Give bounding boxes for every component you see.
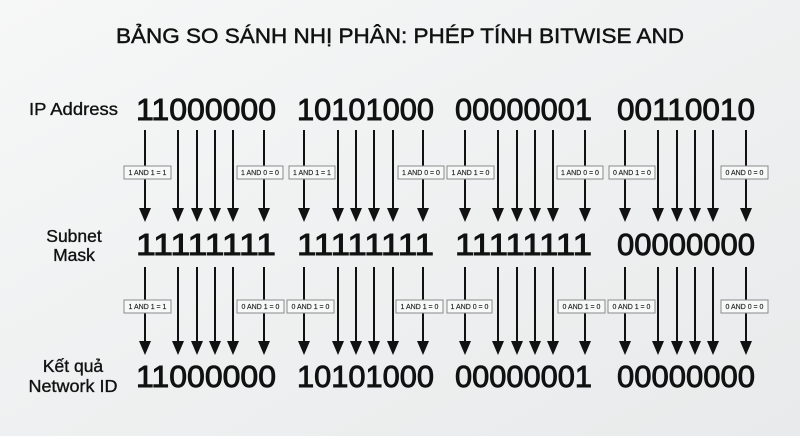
IP address binary: 00000001 (455, 92, 592, 127)
network ID binary: 10101000 (297, 359, 434, 394)
subnet mask binary: 00000000 (617, 227, 755, 262)
IP address binary: 10101000 (297, 92, 434, 127)
operation labels row 2: 0 AND 0 = 0 (726, 304, 764, 311)
subnet mask binary: 11111111 (455, 227, 592, 262)
operation labels row 1: 0 AND 0 = 0 (726, 170, 764, 177)
row label: Network ID (28, 356, 118, 396)
IP address binary: 00110010 (617, 92, 755, 127)
operation labels row 1: 1 AND 0 = 0 (241, 170, 279, 177)
arrows: mask to result (139, 267, 752, 355)
operation labels row 1: 1 AND 1 = 0 (452, 170, 490, 177)
operation labels row 1 (124, 166, 768, 179)
row label: Subnet Mask: Subnet (46, 226, 102, 246)
network ID binary: 11000000 (136, 359, 276, 394)
operation labels row 2: 1 AND 0 = 0 (451, 304, 489, 311)
operation labels row 2 (124, 300, 768, 313)
operation labels row 2: 0 AND 1 = 0 (563, 304, 601, 311)
subnet mask binary: 11111111 (297, 227, 434, 262)
row label: Network ID: Network ID (28, 376, 118, 396)
IP address binary: 11000000 (136, 92, 276, 127)
network ID binary: 00000000 (617, 359, 755, 394)
row label: Subnet Mask (46, 226, 102, 265)
title: BẢNG SO SÁNH NHỊ PHÂN: PHÉP TÍNH BITWISE AND (116, 25, 684, 48)
network ID binary: 00000001 (455, 359, 592, 394)
operation labels row 1: 0 AND 1 = 0 (613, 170, 651, 177)
operation labels row 1: 1 AND 1 = 1 (129, 170, 167, 177)
operation labels row 2: 1 AND 1 = 1 (129, 304, 167, 311)
subnet mask binary (136, 227, 755, 262)
operation labels row 2: 0 AND 1 = 0 (613, 304, 651, 311)
arrows: IP to mask (139, 130, 752, 222)
operation labels row 2: 1 AND 1 = 0 (401, 304, 439, 311)
operation labels row 1: 1 AND 1 = 1 (293, 170, 331, 177)
row label: IP Address: IP Address (29, 99, 118, 119)
operation labels row 1: 1 AND 0 = 0 (402, 170, 440, 177)
subnet mask binary: 11111111 (136, 227, 276, 262)
operation labels row 2: 0 AND 1 = 0 (292, 304, 330, 311)
network ID binary (136, 359, 755, 394)
operation labels row 1: 1 AND 0 = 0 (561, 170, 599, 177)
row label: Subnet Mask: Mask (53, 245, 95, 265)
IP address binary (136, 92, 755, 127)
row label: Network ID: Kết quả (43, 356, 103, 376)
operation labels row 2: 0 AND 1 = 0 (242, 304, 280, 311)
